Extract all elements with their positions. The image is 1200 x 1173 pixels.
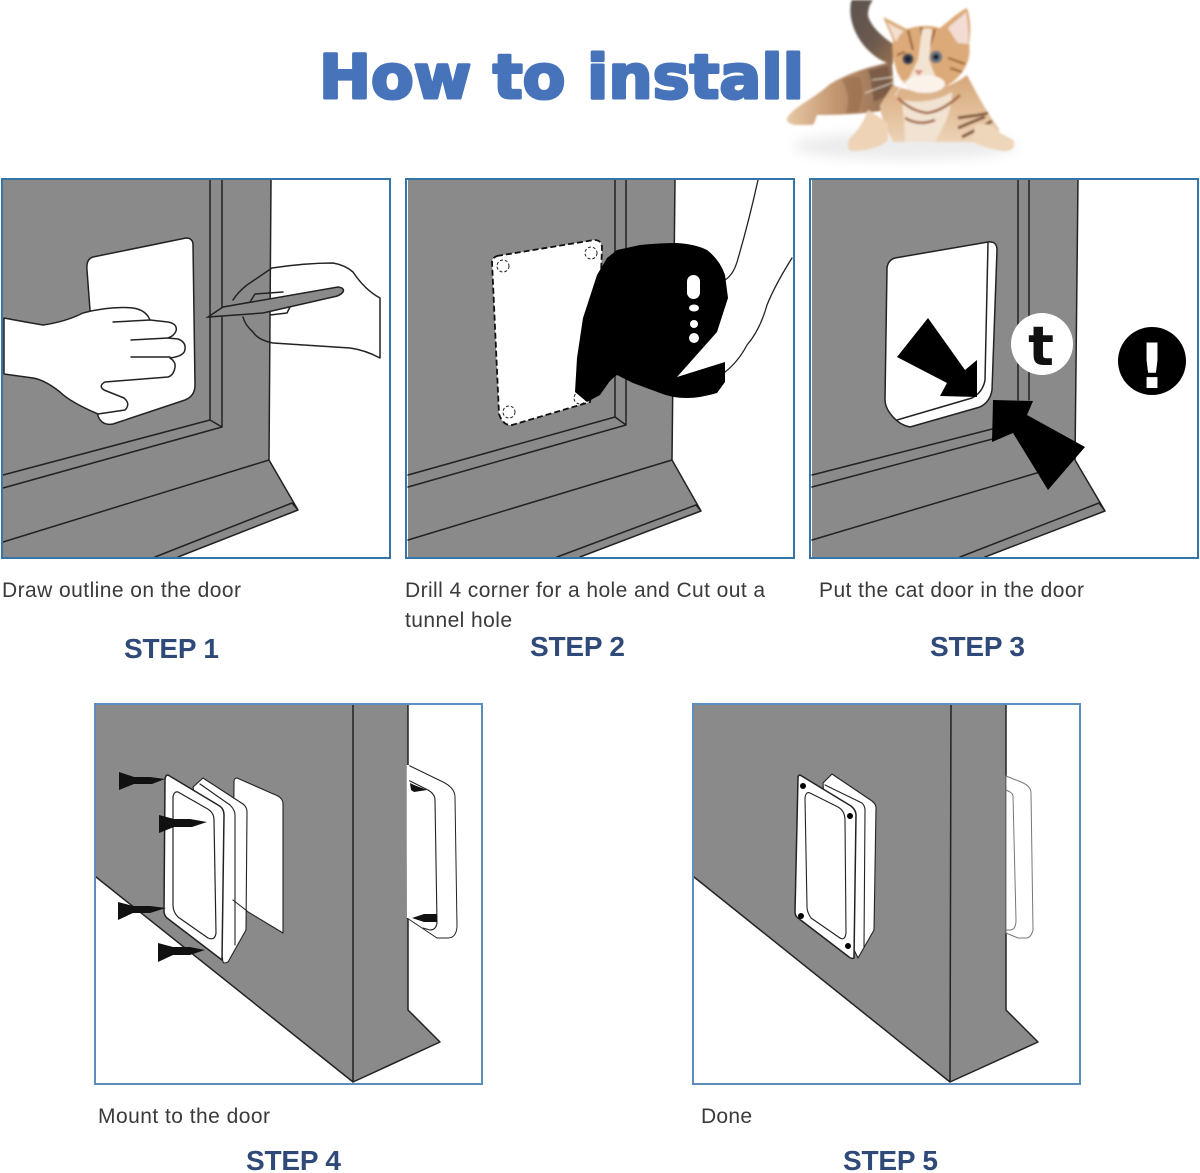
hand lines	[725, 180, 792, 372]
drill hole marks	[497, 247, 597, 418]
frame	[2, 179, 390, 558]
screws	[118, 772, 207, 962]
frame	[95, 704, 482, 1084]
badge: t: t	[1028, 315, 1054, 378]
illustration: kitten	[787, 0, 1017, 160]
panel: step 2 illustration	[406, 179, 794, 558]
badge: t	[1011, 313, 1073, 378]
screw dots	[798, 783, 853, 949]
panel: step 3 illustration	[810, 179, 1198, 558]
black drill	[575, 243, 728, 402]
label: step 2: STEP 2	[530, 631, 625, 662]
left hand pressing the template	[4, 308, 185, 414]
installed flange	[795, 775, 856, 958]
caption: step 2: Drill 4 corner for a hole and Cut out a	[405, 579, 765, 602]
drill controls	[687, 275, 700, 343]
caption: step 1: Draw outline on the door	[2, 579, 241, 602]
arrow into door	[897, 318, 977, 397]
label: step 3: STEP 3	[930, 631, 1025, 662]
caption: step 4: Mount to the door	[98, 1105, 270, 1128]
mounting plate	[233, 778, 283, 933]
tunnel layers	[193, 778, 247, 963]
exterior screws	[410, 783, 437, 922]
exterior flap frame	[407, 765, 457, 938]
exterior flap frame	[1006, 776, 1033, 938]
panel: step 5 illustration	[693, 704, 1080, 1084]
frame	[810, 179, 1198, 558]
badge: warning	[1118, 327, 1186, 403]
caption: step 5: Done	[701, 1105, 752, 1128]
right hand holding a knife	[233, 263, 380, 358]
arrow to door corner	[992, 400, 1085, 490]
caption: step 3: Put the cat door in the door	[819, 579, 1084, 602]
paper template	[87, 238, 195, 424]
badge: warning: !	[1138, 330, 1166, 403]
tunnel layers	[823, 774, 876, 958]
frame	[406, 179, 794, 558]
label: step 1: STEP 1	[124, 633, 219, 664]
panel: step 4 illustration	[95, 704, 482, 1084]
caption: step 2: tunnel hole	[405, 609, 512, 632]
cat door	[885, 242, 997, 427]
panel: step 1 illustration	[2, 179, 390, 558]
title: How to install	[319, 42, 804, 113]
frame	[693, 704, 1080, 1084]
front flange	[164, 775, 224, 960]
dashed cut-out outline	[492, 240, 602, 425]
